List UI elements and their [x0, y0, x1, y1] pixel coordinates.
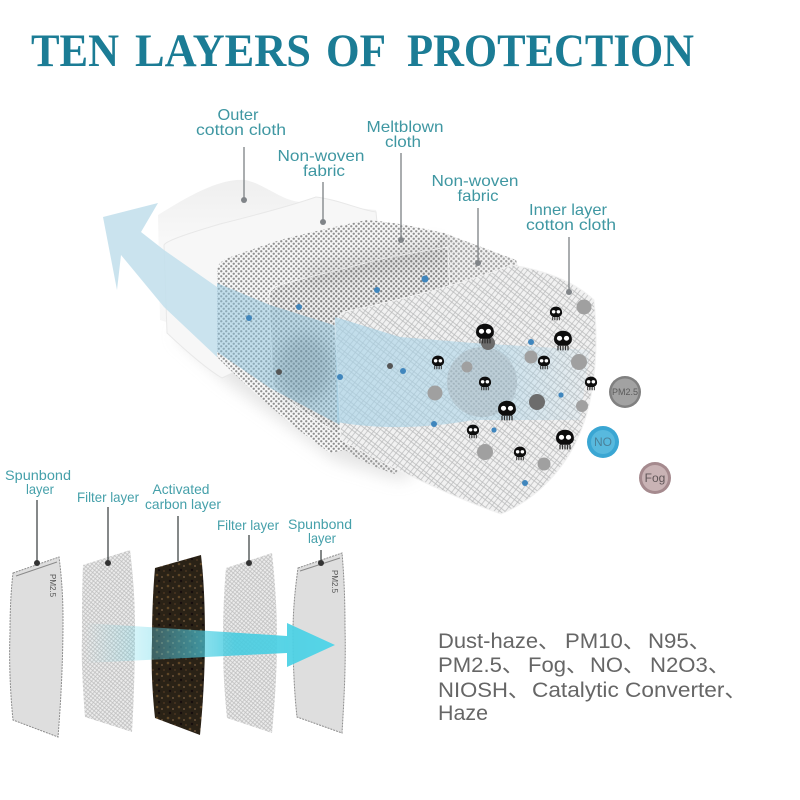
badge: NO: NO	[594, 435, 612, 449]
text block: pollutants: PM2.5、	[438, 654, 524, 677]
airflow arrow back	[103, 203, 217, 357]
filter 4: filter layer	[223, 553, 277, 733]
filter layers diagram	[10, 550, 345, 737]
title	[31, 25, 694, 77]
text block: pollutants: N95、	[648, 630, 711, 653]
badge: PM2.5	[609, 376, 641, 408]
airflow band front	[335, 317, 590, 427]
dark filter blotch	[277, 334, 333, 402]
label: filter layer left: Filter layer	[77, 489, 139, 505]
label: activated carbon layer	[145, 481, 221, 561]
layer: filter core	[269, 247, 450, 433]
layer: non-woven fabric	[164, 197, 384, 378]
label: activated carbon layer: carbon layer	[145, 496, 221, 512]
text block: pollutants: Catalytic Converter、	[532, 679, 747, 702]
PM2.5 mark 1: PM2.5	[48, 574, 57, 598]
valve	[447, 347, 517, 417]
label: activated carbon layer: Activated	[152, 481, 210, 497]
layer: outer cotton cloth	[158, 180, 380, 340]
title: TEN	[31, 25, 119, 77]
callout: non-woven fabric 1	[278, 148, 364, 225]
airflow band through layers	[217, 283, 340, 425]
filter 1: spunbond	[10, 557, 63, 737]
mask layers diagram	[103, 180, 597, 514]
layer: inner cotton cloth	[335, 265, 596, 514]
contaminant particles	[246, 276, 597, 486]
badge: Fog	[639, 462, 671, 494]
label: spunbond layer right: layer	[308, 530, 336, 546]
flow arrow	[85, 623, 335, 667]
label: spunbond layer left: Spunbond	[5, 467, 71, 483]
callout: outer cotton cloth: cotton cloth	[196, 122, 286, 139]
callout: outer cotton cloth: Outer	[218, 107, 259, 124]
callout: non-woven fabric 2: fabric	[458, 188, 498, 205]
label: spunbond layer left: layer	[26, 481, 54, 497]
meltblown streaks	[300, 240, 448, 285]
label: filter layer right	[217, 517, 279, 566]
badge: NO	[587, 426, 619, 458]
text block: pollutants: Haze	[438, 702, 488, 725]
label: filter layer left	[77, 489, 139, 566]
text block: pollutants: NIOSH、	[438, 679, 530, 702]
PM2.5 mark 2: PM2.5	[330, 570, 339, 594]
callout: inner layer cotton cloth	[526, 202, 616, 295]
callout: non-woven fabric 2	[432, 173, 518, 266]
label: spunbond layer right	[288, 516, 352, 566]
label: spunbond layer left	[5, 467, 71, 566]
layer: meltblown cloth	[217, 220, 456, 453]
filter 5: spunbond	[293, 553, 345, 733]
text block: pollutants: Fog、	[528, 654, 588, 677]
shadow under mask	[175, 320, 420, 480]
callout: meltblown cloth: Meltblown	[366, 119, 444, 136]
title: PROTECTION	[407, 25, 694, 77]
layer: non-woven fabric back	[341, 233, 530, 474]
callout: outer cotton cloth	[196, 107, 286, 203]
label: spunbond layer right: Spunbond	[288, 516, 352, 532]
text block: pollutants	[438, 630, 747, 725]
callout: meltblown cloth: cloth	[385, 134, 421, 151]
filter 3: activated carbon	[152, 555, 205, 735]
text block: pollutants: Dust-haze、	[438, 630, 560, 653]
text block: pollutants: PM10、	[565, 630, 645, 653]
callout: meltblown cloth	[366, 119, 444, 243]
text block: pollutants: N2O3、	[650, 654, 730, 677]
callout: non-woven fabric 1: Non-woven	[278, 148, 364, 165]
badge: Fog: Fog	[645, 471, 665, 485]
callout: non-woven fabric 1: fabric	[303, 163, 345, 180]
callout: inner layer cotton cloth: Inner layer	[529, 202, 608, 219]
title: OF	[326, 25, 386, 77]
label: filter layer right: Filter layer	[217, 517, 279, 533]
callout: inner layer cotton cloth: cotton cloth	[526, 217, 616, 234]
badge: PM2.5: PM2.5	[612, 387, 638, 397]
text block: pollutants: NO、	[590, 654, 645, 677]
callout: non-woven fabric 2: Non-woven	[432, 173, 518, 190]
title: LAYERS	[135, 25, 311, 77]
filter 2: filter layer	[82, 550, 135, 732]
